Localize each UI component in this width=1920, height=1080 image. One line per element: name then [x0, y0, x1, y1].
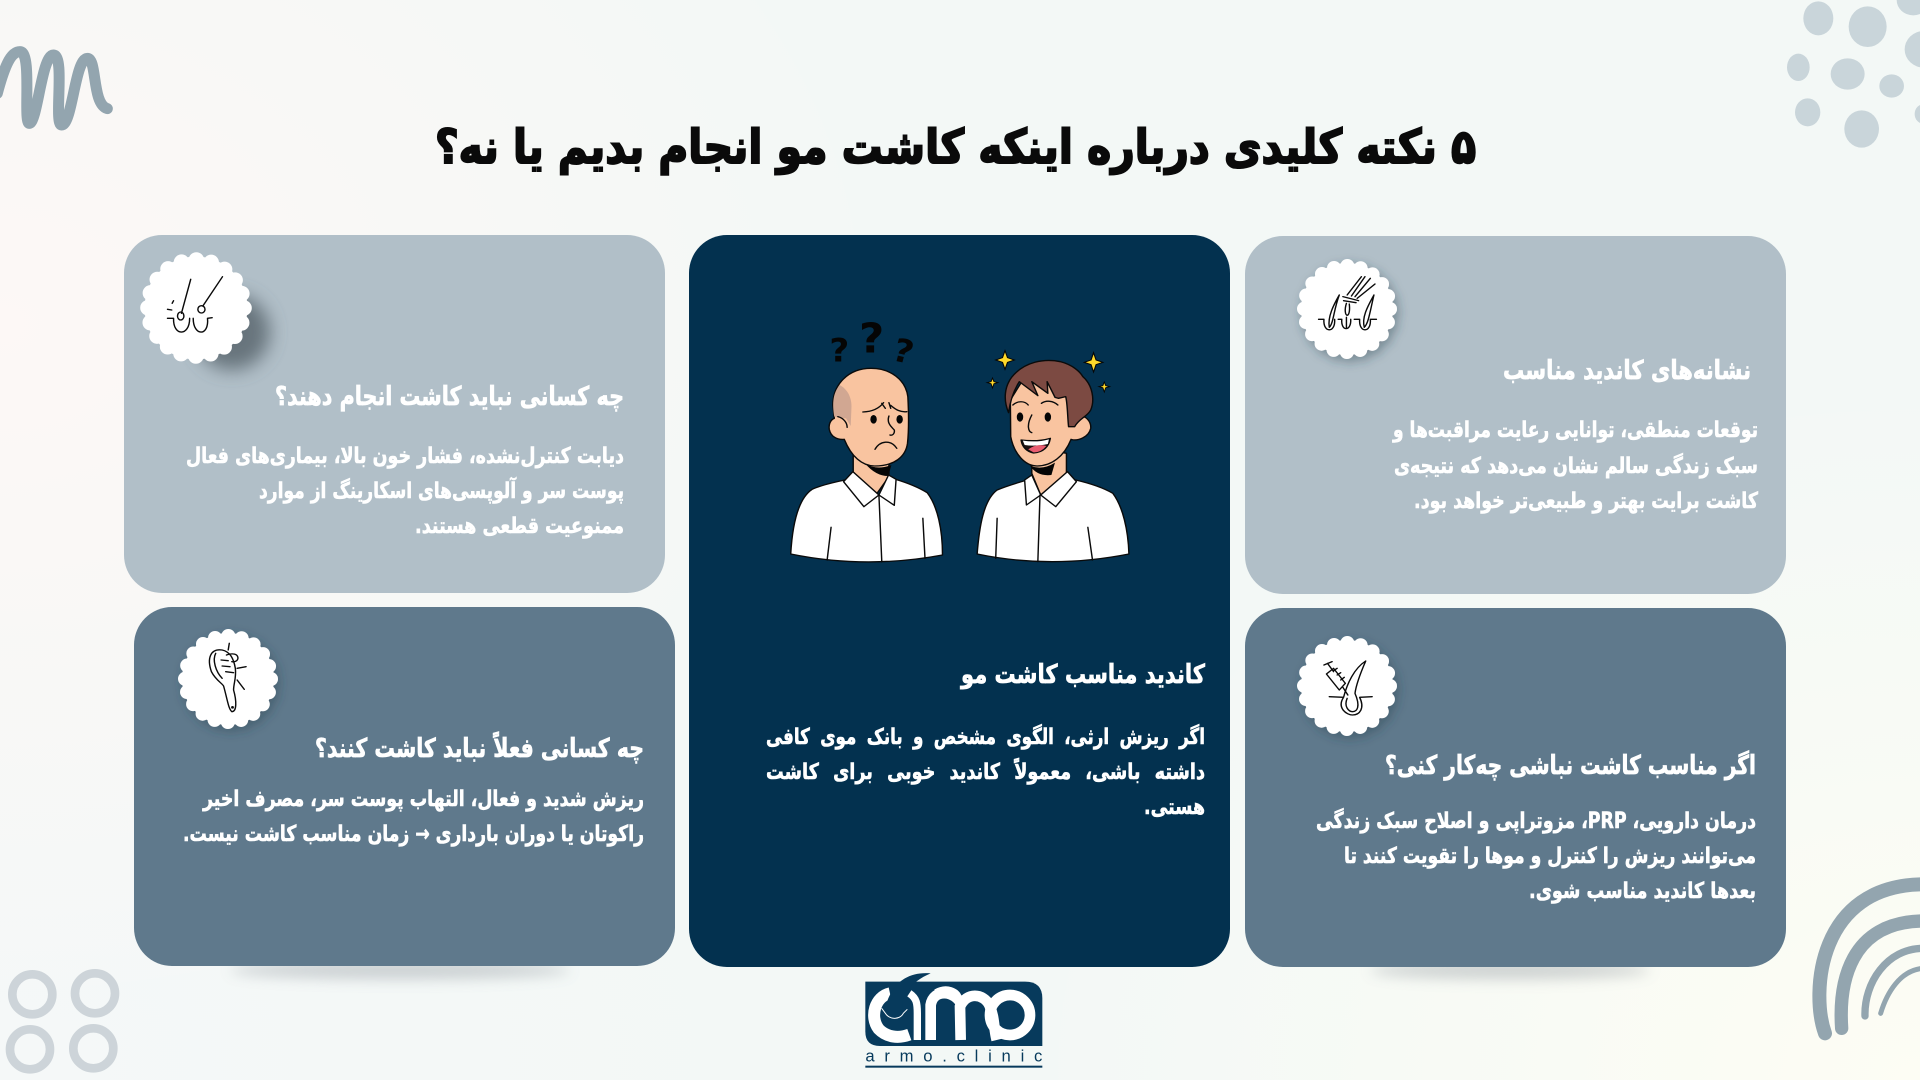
icon: badge with follicles and dropper — [1301, 263, 1393, 355]
body text: داشته باشی، معمولاً کاندید خوبی برای کاشت — [766, 757, 1205, 785]
decoration: rainbow arcs bottom right — [1819, 884, 1920, 1033]
left man: sad and bald — [791, 368, 942, 562]
body text: توقعات منطقی، توانایی رعایت مراقبت‌ها و — [1392, 418, 1758, 443]
title: ۵ نکته کلیدی درباره اینکه کاشت مو انجام بدیم یا نه؟ — [435, 120, 1476, 175]
body text — [1316, 807, 1756, 904]
decoration: dots top right — [1787, 0, 1920, 148]
body text: اگر ریزش ارثی، الگوی مشخص و بانک موی کافی — [766, 723, 1205, 750]
icon: question marks: ? — [859, 315, 884, 362]
illustration: bald sad man and happy man — [791, 315, 1129, 562]
soft shadows under the bottom cards — [230, 961, 1650, 979]
body text — [766, 723, 1205, 820]
icon: badge with hair brush — [182, 633, 274, 725]
body text: کاشت برایت بهتر و طبیعی‌تر خواهد بود. — [1414, 489, 1758, 514]
icon: badge with two hair follicles — [144, 256, 270, 370]
panel: right hair transplant candidate (center) — [689, 235, 1230, 967]
body text: بعدها کاندید مناسب شوی. — [1529, 879, 1756, 904]
body text: دیابت کنترل‌نشده، فشار خون بالا، بیماری‌های فعال — [186, 444, 624, 469]
panel: who should not get a transplant — [124, 235, 665, 593]
heading: چه کسانی نباید کاشت انجام دهند؟ — [275, 382, 624, 412]
panel: who should not get a transplant right now — [134, 607, 675, 966]
body text: راکوتان یا دوران بارداری → زمان مناسب کاشت نیست. — [183, 822, 644, 847]
heading: چه کسانی فعلاً نباید کاشت کنند؟ — [315, 731, 644, 764]
body text — [1392, 418, 1758, 514]
body text: درمان دارویی، PRP، مزوتراپی و اصلاح سبک زندگی — [1316, 807, 1756, 834]
decoration: four rings bottom left — [10, 973, 115, 1069]
heading: کاندید مناسب کاشت مو — [959, 660, 1206, 690]
body text — [186, 444, 624, 539]
body text: می‌توانند ریزش را کنترل و موها را تقویت کنند تا — [1344, 844, 1756, 869]
decoration: squiggle top left — [0, 52, 107, 125]
logo: armo clinic — [865, 973, 1042, 1068]
panel: what to do if not a candidate — [1245, 608, 1786, 967]
panel: signs of a good candidate — [1245, 236, 1786, 594]
icon: question marks — [829, 315, 918, 372]
body text: ریزش شدید و فعال، التهاب پوست سر، مصرف اخیر — [202, 787, 644, 812]
body text: هستی. — [1144, 795, 1205, 820]
right man: happy with hair — [977, 351, 1129, 562]
body text: ممنوعیت قطعی هستند. — [415, 514, 624, 539]
body text: پوست سر و آلوپسی‌های اسکارینگ از موارد — [259, 476, 624, 504]
icon: badge with syringe and follicle — [1301, 640, 1393, 732]
heading: اگر مناسب کاشت نباشی چه‌کار کنی؟ — [1385, 750, 1756, 781]
logo: armo clinic: armo.clinic — [865, 1047, 1042, 1066]
body text — [183, 787, 644, 847]
body text: سبک زندگی سالم نشان می‌دهد که نتیجه‌ی — [1394, 452, 1758, 479]
heading: نشانه‌های کاندید مناسب — [1503, 356, 1751, 386]
icon: question marks: ? — [889, 331, 918, 372]
icon: question marks: ? — [829, 331, 849, 369]
